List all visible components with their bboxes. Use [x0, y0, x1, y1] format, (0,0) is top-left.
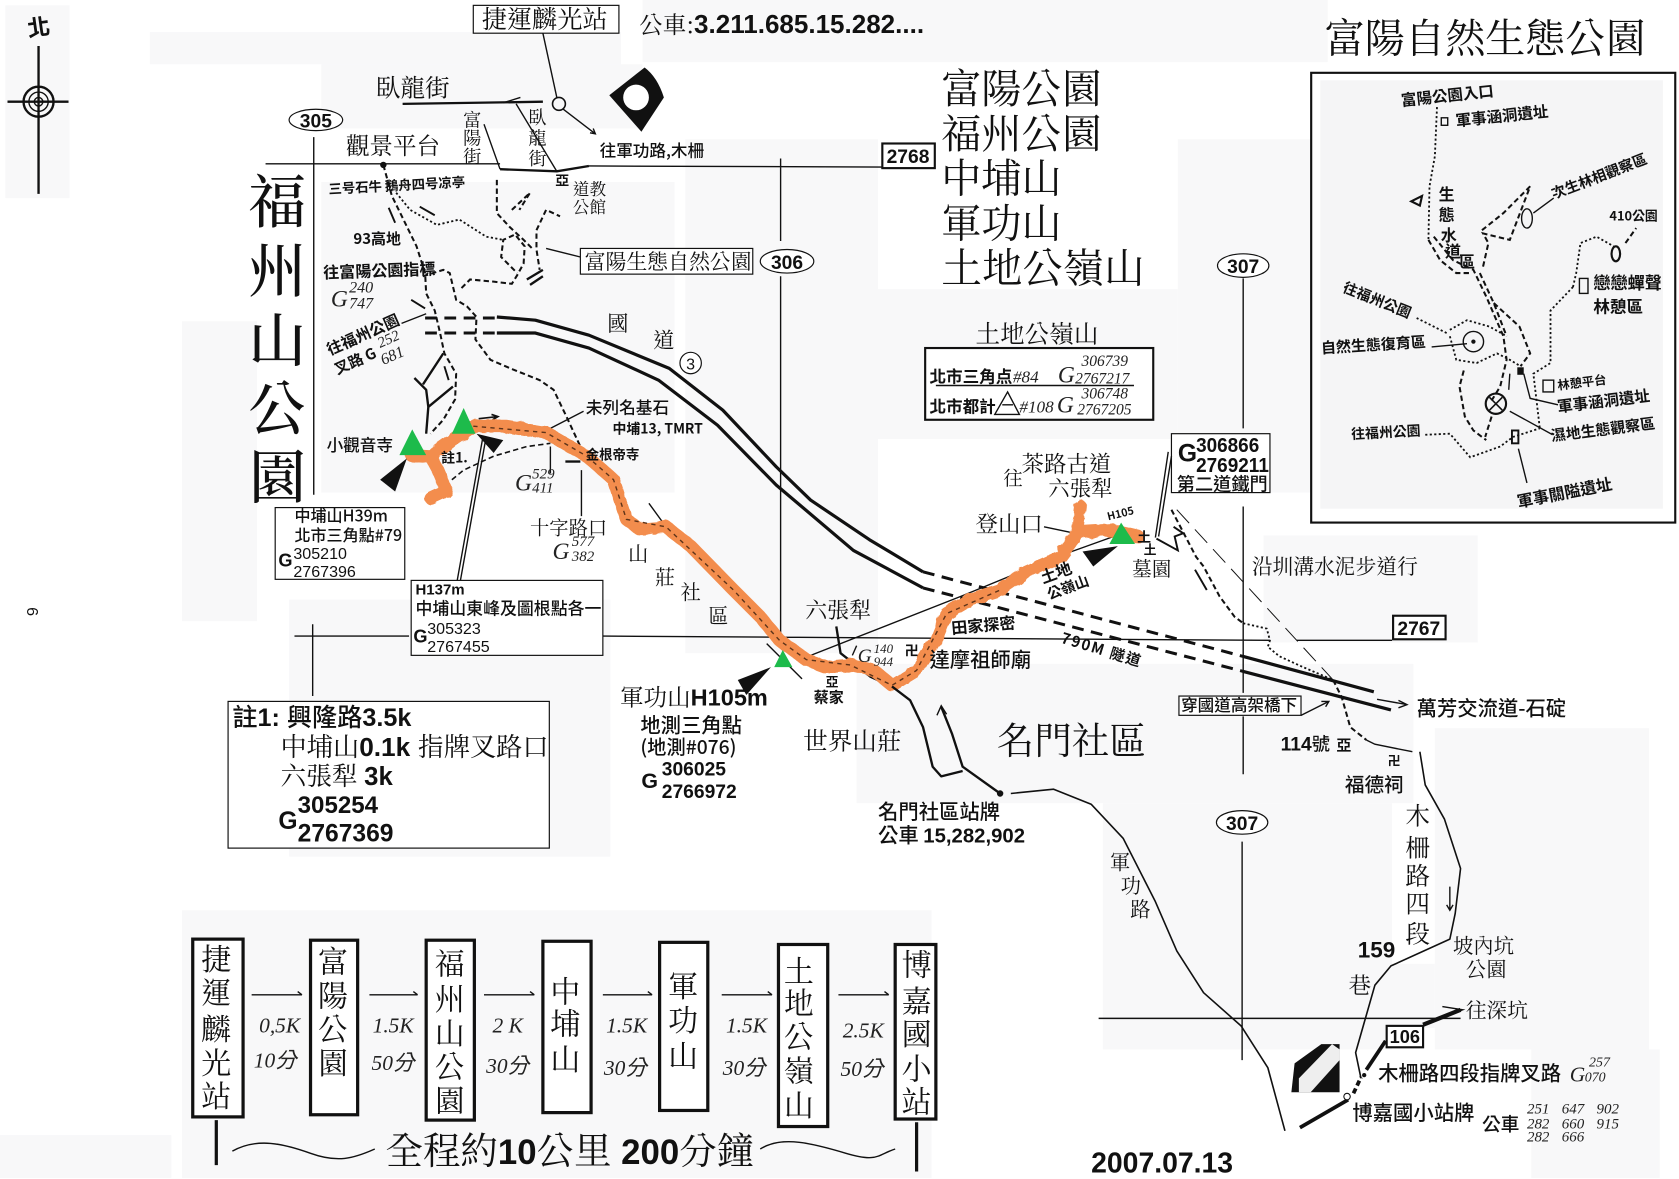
step: 土地公嶺山 — [778, 944, 828, 1127]
panel labels: 生 — [1439, 181, 1455, 205]
labels: eastern trail: 往 — [1003, 463, 1023, 491]
label: 軍功山 H105m — [620, 679, 768, 803]
step: 博嘉國小站: 站 — [902, 1078, 932, 1122]
road: 臥龍街 area: 富 — [463, 106, 481, 132]
labels: eastern trail: 茶路古道 — [1022, 447, 1111, 479]
road: 木柵路四段: 路 — [1405, 858, 1430, 893]
road: 木柵路四段: 公園 — [1466, 954, 1507, 983]
labels: eastern trail: 墓園 — [1132, 553, 1171, 582]
step: 捷運麟光站: 麟 — [201, 1005, 231, 1049]
labels: eastern trail: 公嶺山 — [1044, 570, 1092, 604]
road: 臥龍街 area: 臥 — [528, 104, 547, 130]
box: 土地公嶺山 triangulation points — [925, 316, 1153, 420]
callout: 中埔山 H39m: 305210 — [293, 545, 347, 563]
road: 臥龍街 area — [376, 33, 704, 218]
labels: 木柵路四段指牌叉路 and bus: 257 — [1589, 1056, 1611, 1071]
flow arrows — [252, 992, 889, 995]
summit marker 2 — [452, 408, 475, 434]
labels: 木柵路四段指牌叉路 and bus: G — [1570, 1063, 1585, 1087]
panel labels: 道 — [1445, 238, 1461, 262]
road: 軍功路: 名門社區站牌 — [878, 795, 1000, 825]
labels: eastern trail: 土 — [1137, 527, 1151, 547]
heading: 名門社區: 名門社區 — [997, 711, 1147, 765]
heading list: route summits — [941, 58, 1145, 295]
labels: mid route: 382 — [571, 549, 595, 565]
distances and times: 2.5K — [843, 1019, 885, 1043]
labels: mid route: 區 — [708, 600, 729, 629]
panel labels — [1320, 79, 1662, 512]
grid marks and tick boxes: 305 — [300, 111, 332, 132]
heading: 福州山公園: 州 — [248, 224, 306, 308]
heading list: route summits: 土地公嶺山 — [941, 236, 1145, 295]
distances and times — [254, 1013, 886, 1081]
road: 臥龍街 area: 陽 — [463, 125, 481, 151]
handwritten labels: western section: G — [331, 286, 348, 312]
trails: dashed hiking paths — [380, 162, 1114, 686]
distances and times: 1.5K — [373, 1013, 415, 1037]
direction wedge 3 — [738, 667, 771, 695]
box: 土地公嶺山 triangulation points: 北市三角点 — [929, 363, 1013, 387]
labels: 木柵路四段指牌叉路 and bus: 070 — [1585, 1071, 1606, 1086]
labels: mid route: 未列名基石 — [586, 394, 669, 418]
step: 福州山公園 — [426, 939, 474, 1121]
step: 中埔山: 埔 — [550, 999, 580, 1043]
labels: 木柵路四段指牌叉路 and bus: 282 660 915 — [1527, 1117, 1620, 1133]
road: 臥龍街 area: 公館 — [573, 194, 606, 218]
labels: 木柵路四段指牌叉路 and bus: 282 666 — [1527, 1130, 1585, 1146]
callout: 中埔山 H39m: 北市三角點#79 — [294, 522, 402, 546]
step: 軍功山: 山 — [668, 1032, 698, 1076]
panel labels: 戀戀蟬聲 — [1593, 269, 1662, 294]
labels: 六張犁 and 達摩祖師廟: 達摩祖師廟 — [929, 643, 1031, 673]
road: 106 to 深坑 — [1300, 993, 1528, 1128]
box: 土地公嶺山 triangulation points: 306739 — [1080, 353, 1128, 370]
callout: H137m 中埔山東峰: H137m — [415, 581, 465, 598]
labels: mid route: 十字路口 — [530, 512, 607, 540]
panel labels: 林憩區 — [1593, 294, 1643, 318]
labels: 六張犁 and 達摩祖師廟: 亞 — [826, 671, 839, 690]
step: 捷運麟光站 — [193, 935, 243, 1117]
note box: 註1: G — [278, 808, 298, 835]
distances and times: 30分 — [485, 1054, 532, 1078]
grid marks and tick boxes — [266, 109, 1461, 1060]
step: 富陽公園: 富 — [318, 937, 348, 981]
handwritten labels: western section: 240 — [349, 279, 373, 296]
icon: north compass — [7, 9, 69, 194]
label: 軍功山 H105m: 306025 — [662, 759, 726, 780]
labels: eastern trail: 沿圳溝水泥步道行 — [1252, 550, 1418, 580]
step: 土地公嶺山: 土 — [784, 947, 814, 991]
labels: 六張犁 and 達摩祖師廟: 790M 隧道 — [1059, 627, 1145, 672]
distances and times: 1.5K — [726, 1013, 769, 1037]
highway: national road 3: 3 — [686, 355, 695, 373]
grid marks and tick boxes: 2767 — [1397, 619, 1440, 640]
road: 軍功路 — [878, 686, 1285, 1131]
road: 木柵路四段: 159 — [1358, 937, 1395, 962]
step: 富陽公園 — [311, 937, 358, 1115]
distances and times: 0,5K — [259, 1013, 302, 1037]
labels: 六張犁 and 達摩祖師廟 — [803, 594, 1145, 758]
callout: H137m 中埔山東峰: 中埔山東峰及圖根點各一 — [415, 595, 602, 620]
step: 土地公嶺山: 嶺 — [784, 1047, 816, 1091]
labels: mid route: 小觀音寺 — [327, 432, 393, 456]
labels: mid route: 金根帝寺 — [586, 443, 639, 463]
step: 福州山公園: 福 — [435, 939, 465, 983]
road: 臥龍街 area: 街 — [528, 145, 547, 171]
date: 2007.07.13 — [1091, 1148, 1233, 1179]
box: 土地公嶺山 triangulation points: #108 — [1019, 397, 1054, 416]
grid marks and tick boxes: 307 — [1226, 814, 1258, 835]
panel labels: 富陽公園入口 — [1400, 79, 1495, 111]
direction wedge 1 — [380, 458, 407, 492]
total: 全程約10公里 200分鐘: 全程約10公里 200分鐘 — [385, 1121, 754, 1175]
road: 木柵路四段: 段 — [1405, 915, 1430, 950]
step: 中埔山: 中 — [550, 967, 580, 1011]
handwritten labels: western section: 叉路 G — [331, 342, 380, 379]
labels: mid route: 莊 — [655, 562, 675, 591]
panel labels: 次生林相觀察區 — [1548, 148, 1650, 204]
label: 萬芳交流道-石碇: 萬芳交流道-石碇 — [1417, 691, 1566, 721]
callout: G306866 第二道鐵門: 306866 — [1196, 435, 1259, 457]
callout: H137m 中埔山東峰 — [411, 580, 603, 656]
label: 軍功山 H105m: 2766972 — [662, 782, 737, 803]
label: 軍功山 H105m: G — [641, 769, 658, 793]
road: 臥龍街 area: 亞 — [555, 170, 569, 190]
step: 博嘉國小站: 小 — [902, 1044, 933, 1088]
heading list: route summits: 軍功山 — [941, 193, 1062, 250]
labels: 六張犁 and 達摩祖師廟: 世界山莊 — [803, 723, 902, 758]
callout: H137m 中埔山東峰: 2767455 — [427, 638, 490, 656]
box: 土地公嶺山 triangulation points: G — [1057, 392, 1074, 418]
road: 臥龍街 area: 街 — [463, 143, 481, 169]
total: 全程約10公里 200分鐘 — [216, 1120, 917, 1175]
label: 觀景平台: 觀景平台 — [346, 127, 440, 161]
panel labels: 410公園 — [1609, 206, 1658, 225]
page number: 6 — [23, 607, 41, 616]
labels: 木柵路四段指牌叉路 and bus: 公車 — [1482, 1110, 1519, 1137]
step: 捷運麟光站: 光 — [201, 1039, 231, 1083]
step: 土地公嶺山: 地 — [784, 979, 814, 1023]
distances and times: 30分 — [722, 1056, 768, 1080]
flow: route summary boxes — [193, 935, 936, 1127]
step: 博嘉國小站: 嘉 — [902, 977, 932, 1021]
labels: mid route — [327, 394, 729, 629]
panel labels: 往福州公園 — [1351, 420, 1421, 444]
labels: 六張犁 and 達摩祖師廟: 944 — [874, 655, 894, 669]
distances and times: 1.5K — [606, 1013, 649, 1037]
handwritten labels: western section: 往富陽公園指標 — [323, 256, 436, 283]
step: 福州山公園: 園 — [435, 1077, 465, 1121]
note box: 註1: 中埔山0.1k 指牌叉路口 — [281, 726, 549, 764]
handwritten labels: western section: 三号石牛 鵝舟四号凉亭 — [328, 171, 466, 198]
labels: 六張犁 and 達摩祖師廟: 六張犁 — [805, 594, 871, 625]
box: 土地公嶺山 triangulation points: 306748 — [1080, 385, 1128, 402]
road: 軍功路: 公車 15,282,902 — [878, 819, 1025, 849]
handwritten labels: western section: 93高地 — [353, 228, 401, 249]
step: 福州山公園: 州 — [435, 975, 465, 1019]
labels: mid route: 註1. — [441, 448, 468, 468]
labels: mid route: 山 — [628, 538, 648, 567]
panel: 富陽自然生態公園 trail map — [1311, 73, 1675, 523]
grid marks and tick boxes: 2768 — [887, 147, 930, 168]
road: 木柵路四段: 卍 — [1388, 751, 1401, 770]
labels: 木柵路四段指牌叉路 and bus: 博嘉國小站牌 — [1352, 1096, 1474, 1126]
panel labels: 軍事涵洞遺址 — [1556, 384, 1651, 417]
note box: 註1: 2767369 — [298, 821, 393, 848]
road: 木柵路四段: 四 — [1405, 885, 1430, 920]
labels: 木柵路四段指牌叉路 and bus — [1352, 1056, 1620, 1146]
icon: striped black sector — [1291, 1044, 1340, 1092]
heading: 富陽自然生態公園: 富陽自然生態公園 — [1325, 7, 1646, 64]
road: 木柵路四段: 坡內坑 — [1453, 930, 1514, 959]
step: 中埔山: 山 — [550, 1035, 580, 1079]
step: 軍功山 — [660, 942, 708, 1110]
distances and times: 50分 — [841, 1057, 886, 1081]
panel labels: 態 — [1439, 202, 1455, 226]
road: 軍功路: 軍 — [1110, 847, 1130, 876]
callout: G306866 第二道鐵門 — [1155, 434, 1270, 538]
road: 木柵路四段: 木 — [1405, 798, 1430, 833]
distances and times: 2 K — [493, 1013, 525, 1037]
step: 捷運麟光站: 站 — [201, 1072, 231, 1116]
grid marks and tick boxes: 307 — [1227, 257, 1259, 278]
labels: eastern trail — [975, 447, 1418, 604]
callout: H137m 中埔山東峰: 305323 — [427, 620, 481, 638]
summit marker 1 — [399, 429, 426, 455]
icon: black sector with hole — [609, 67, 664, 132]
box: 土地公嶺山 triangulation points: 2767205 — [1077, 401, 1132, 418]
handwritten labels: western section: 252 — [375, 328, 403, 352]
callout: G306866 第二道鐵門: 2769211 — [1196, 455, 1269, 477]
road: 軍功路: 功 — [1121, 870, 1141, 899]
heading: 福州山公園: 福 — [248, 156, 306, 240]
callout: 中埔山 H39m: 2767396 — [293, 563, 356, 581]
callout: G306866 第二道鐵門: 第二道鐵門 — [1177, 470, 1268, 496]
labels: mid route: 社 — [680, 577, 701, 606]
labels: mid route: G — [515, 470, 532, 496]
step: 中埔山 — [543, 941, 591, 1113]
heading: 福州山公園: 公 — [248, 362, 306, 446]
callout: 中埔山 H39m — [275, 503, 405, 581]
road: 木柵路四段: 巷 — [1349, 969, 1371, 1001]
labels: 木柵路四段指牌叉路 and bus: 木柵路四段指牌叉路 — [1378, 1056, 1561, 1086]
distances and times: 30分 — [603, 1056, 649, 1080]
road: 木柵路四段: 柵 — [1405, 830, 1430, 865]
distances and times: 50分 — [372, 1051, 417, 1075]
panel labels: 區 — [1459, 249, 1475, 273]
panel labels: 自然生態復育區 — [1320, 331, 1426, 358]
road: 軍功路: 路 — [1130, 894, 1151, 923]
labels: eastern trail: 六張犁 — [1048, 472, 1113, 503]
step: 土地公嶺山: 公 — [784, 1012, 814, 1056]
panel labels: 往福州公園 — [1340, 276, 1415, 323]
label: 富陽生態自然公園 box: 富陽生態自然公園 — [585, 245, 752, 275]
step: 富陽公園: 陽 — [318, 972, 348, 1016]
highway: national road 3 — [425, 307, 1407, 710]
summit marker 3 — [774, 650, 792, 667]
step: 捷運麟光站: 運 — [201, 968, 231, 1012]
step: 博嘉國小站: 國 — [902, 1010, 932, 1054]
step: 捷運麟光站: 捷 — [201, 935, 231, 979]
trail: 沿圳溝 walkway — [1156, 510, 1412, 752]
heading list: route summits: 中埔山 — [941, 148, 1062, 205]
road: 臥龍街 area: 往軍功路,木柵 — [600, 137, 704, 161]
labels: 六張犁 and 達摩祖師廟: 140 — [874, 642, 894, 656]
labels: 木柵路四段指牌叉路 and bus: 251 647 902 — [1527, 1102, 1620, 1118]
labels: mid route: 577 — [572, 534, 595, 550]
labels: mid route: G — [553, 539, 570, 565]
step: 福州山公園: 山 — [435, 1009, 465, 1053]
labels: mid route: 中埔13, TMRT — [612, 419, 703, 439]
route: orange hiked track — [380, 408, 1138, 695]
panel labels: 軍事關隘遺址 — [1515, 471, 1614, 512]
road: 臥龍街 area: 道教 — [573, 176, 606, 200]
note box: 註1 — [228, 698, 549, 848]
labels: 六張犁 and 達摩祖師廟: 蔡家 — [814, 686, 844, 707]
road: 106 to 深坑: 往深坑 — [1466, 993, 1528, 1023]
box: 穿國道高架橋下: 穿國道高架橋下 — [1181, 692, 1297, 716]
labels: eastern trail: 土 — [1144, 540, 1157, 559]
note box: 註1: 註1: 興隆路3.5k — [232, 698, 412, 734]
panel labels: 水 — [1441, 222, 1457, 246]
panel labels: 軍事涵洞遺址 — [1454, 100, 1550, 131]
highway: national road 3: 道 — [653, 324, 675, 355]
road: 木柵路四段: 福德祠 — [1345, 768, 1404, 797]
labels: mid route: 411 — [532, 481, 554, 497]
labels: eastern trail: H105 — [1106, 503, 1135, 524]
handwritten labels: western section: 往福州公園 — [323, 308, 403, 360]
road: 木柵路四段: 114號 — [1281, 731, 1330, 757]
heading: 福州山公園: 山 — [248, 294, 306, 378]
labels: 六張犁 and 達摩祖師廟: 田家探密 — [950, 609, 1016, 639]
step: 富陽公園: 公 — [318, 1005, 348, 1049]
handwritten labels: western section: 747 — [349, 295, 374, 312]
labels: 六張犁 and 達摩祖師廟: 卍 — [905, 640, 919, 660]
step: 軍功山: 軍 — [668, 962, 698, 1006]
box: 土地公嶺山 triangulation points: 2767217 — [1075, 370, 1131, 387]
panel labels: 林憩平台 — [1556, 370, 1607, 394]
icon: north compass: 北 — [25, 9, 52, 44]
labels: eastern trail: 登山口 — [975, 507, 1043, 539]
step: 福州山公園: 公 — [435, 1042, 465, 1086]
labels: mid route: 529 — [532, 467, 555, 483]
road: 臥龍街 area: 臥龍街 — [376, 69, 450, 104]
heading: 福州山公園: 園 — [248, 431, 306, 515]
heading list: route summits: 福州公園 — [941, 103, 1102, 160]
grid marks and tick boxes: 306 — [771, 253, 803, 274]
summit marker 4 — [1109, 523, 1135, 544]
label: 軍功山 H105m: 地測三角點 — [640, 708, 742, 738]
road: 106 to 深坑: 106 — [1390, 1027, 1420, 1047]
road: 木柵路四段: 亞 — [1336, 735, 1351, 756]
step: 博嘉國小站 — [895, 941, 936, 1122]
box: 土地公嶺山 triangulation points: #84 — [1013, 367, 1039, 386]
panel labels: 濕地生態觀察區 — [1550, 413, 1656, 446]
box: 土地公嶺山 triangulation points: 土地公嶺山 — [975, 316, 1099, 351]
bus lines: 公車:3.211.685.15.282.... — [639, 6, 924, 40]
handwritten labels: western section: 681 — [378, 343, 407, 369]
box: 土地公嶺山 triangulation points: G — [1058, 362, 1075, 388]
callout: G306866 第二道鐵門: G — [1178, 441, 1197, 468]
label: 軍功山 H105m: 軍功山H105m — [620, 679, 768, 713]
label: 軍功山 H105m: (地測#076) — [640, 732, 737, 760]
direction wedge 4 — [1083, 546, 1118, 566]
callout: 中埔山 H39m: 中埔山H39m — [294, 503, 388, 527]
callout: 中埔山 H39m: G — [278, 550, 293, 570]
note box: 註1: 305254 — [298, 792, 379, 819]
note box: 註1: 六張犁 3k — [281, 756, 393, 793]
step: 土地公嶺山: 山 — [784, 1081, 814, 1125]
step: 博嘉國小站: 博 — [902, 941, 932, 985]
handwritten labels: western section — [323, 171, 466, 379]
step: 軍功山: 功 — [668, 996, 698, 1040]
heading list: route summits: 富陽公園 — [941, 58, 1102, 115]
labels: eastern trail: 土地 — [1036, 555, 1075, 588]
box: 土地公嶺山 triangulation points: 北市都計 — [929, 393, 996, 417]
callout: H137m 中埔山東峰: G — [413, 627, 427, 647]
road: 木柵路四段 — [1281, 731, 1514, 1078]
step: 富陽公園: 園 — [318, 1039, 348, 1083]
road: 臥龍街 area: 龍 — [528, 125, 547, 151]
station box: 捷運麟光站: 捷運麟光站 — [482, 0, 608, 36]
highway: national road 3: 國 — [607, 307, 629, 338]
distances and times: 10分 — [254, 1049, 299, 1073]
labels: 六張犁 and 達摩祖師廟: G — [858, 646, 872, 667]
direction wedge 2 — [477, 434, 503, 453]
